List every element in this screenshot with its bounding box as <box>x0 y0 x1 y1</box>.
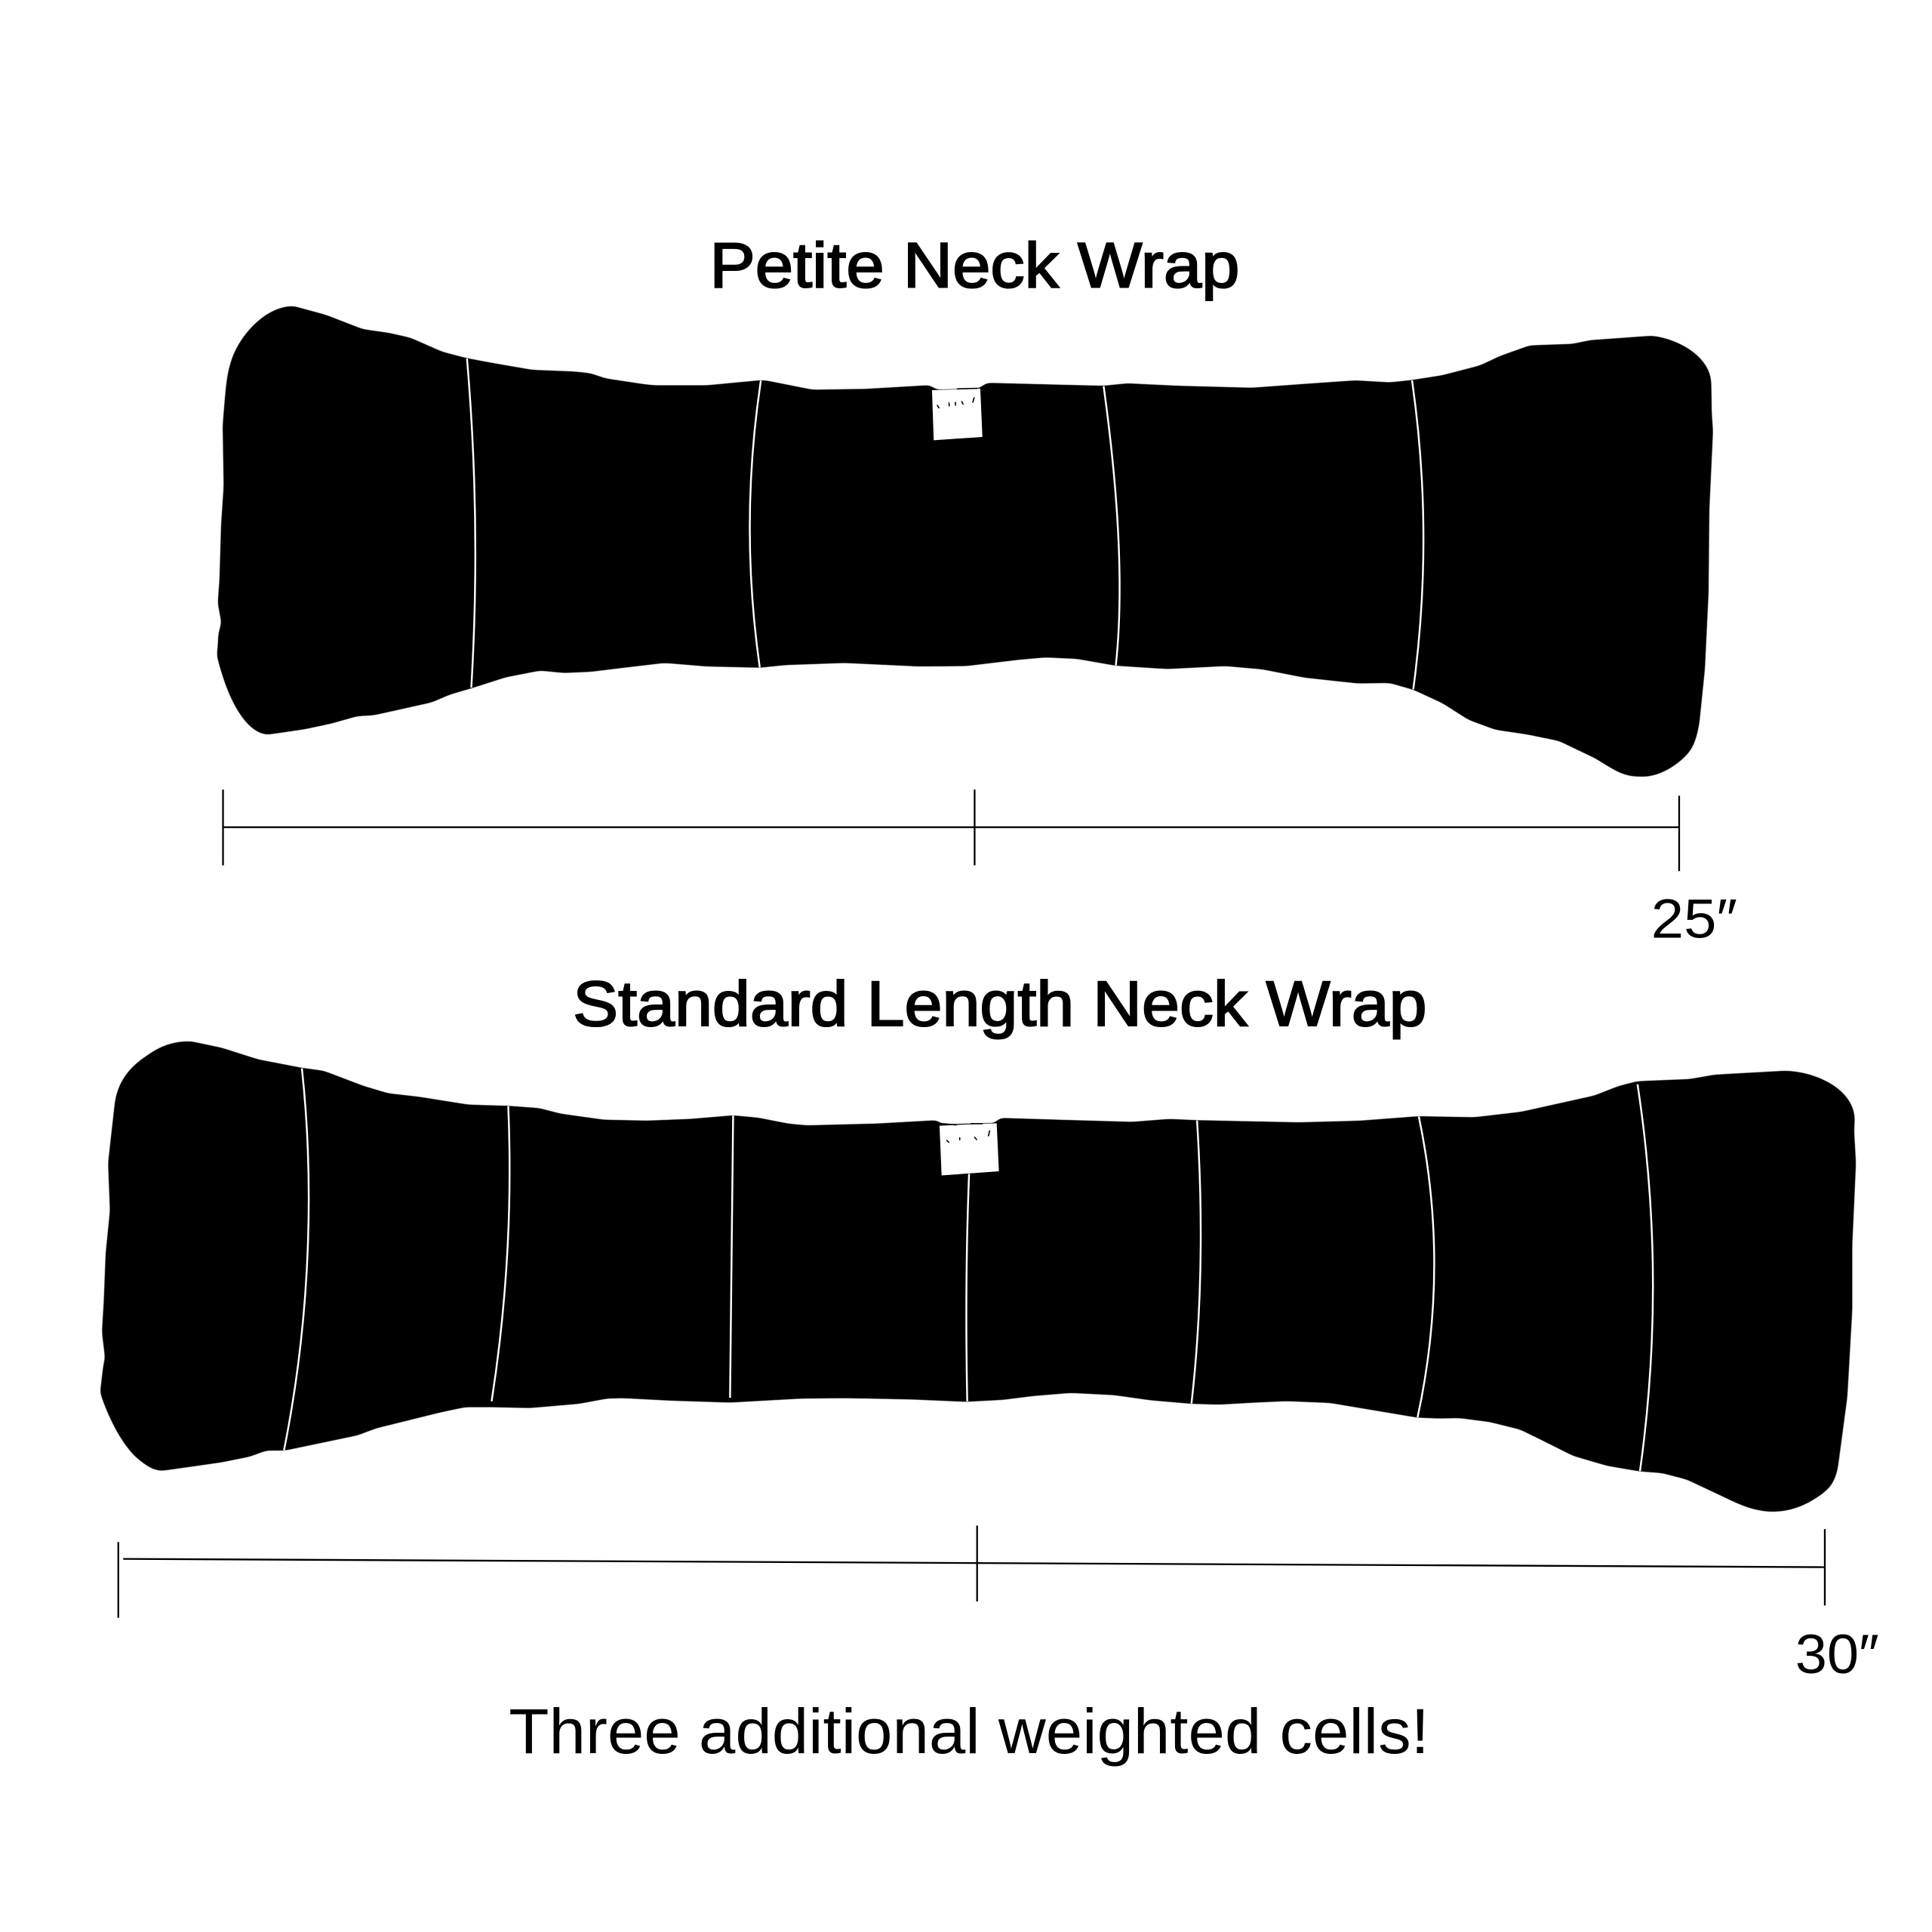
measurement: standard length <box>118 1526 1826 1618</box>
standard wrap tag <box>940 1123 999 1176</box>
panel: standard neck wrap illustration <box>100 1041 1856 1512</box>
petite wrap tag <box>932 389 983 440</box>
label: 25 inches: 25″ <box>1651 887 1737 949</box>
petite wrap silhouette <box>217 306 1712 777</box>
measurement: petite length <box>223 789 1679 871</box>
caption: three additional weighted cells: Three additional weighted cells! <box>509 1695 1429 1767</box>
panel: petite neck wrap illustration <box>217 306 1712 777</box>
heading: Standard Length Neck Wrap: Standard Length Neck Wrap <box>573 968 1427 1039</box>
label: 30 inches: 30″ <box>1795 1623 1879 1685</box>
standard wrap cell seams <box>284 1069 1653 1471</box>
petite wrap cell seams <box>467 358 1423 689</box>
standard wrap silhouette <box>100 1041 1856 1512</box>
heading: Petite Neck Wrap: Petite Neck Wrap <box>709 229 1239 300</box>
